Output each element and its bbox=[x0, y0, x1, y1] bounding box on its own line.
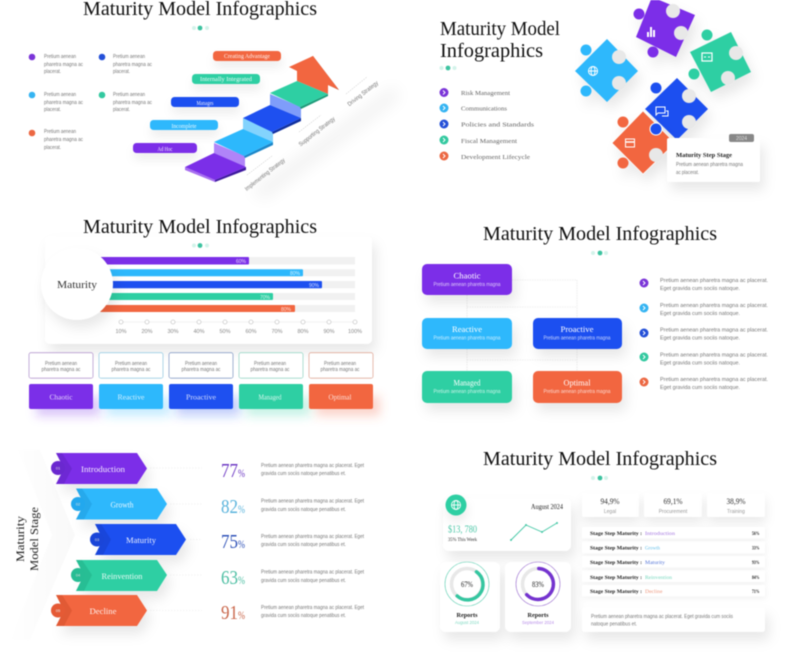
legend list: Pretium aenean bbox=[44, 92, 76, 98]
hierarchy boxes: Optimal bbox=[564, 378, 591, 388]
stage rows: Reinvention bbox=[645, 575, 672, 581]
percentage axis: 30% bbox=[167, 329, 179, 335]
stage rows: Stage Step Maturity : bbox=[590, 546, 642, 552]
heading dots bbox=[440, 66, 456, 70]
stage labels: Incomplete bbox=[172, 124, 197, 130]
title dots bbox=[192, 243, 209, 248]
title dots bbox=[192, 26, 209, 30]
ring card: September: 83% bbox=[532, 580, 544, 589]
arrow: reinvention bbox=[71, 560, 167, 591]
stage boxes: Optimal bbox=[328, 392, 352, 402]
topic list: Policies and Standards bbox=[461, 122, 535, 128]
arrow: decline: 05 bbox=[56, 608, 61, 613]
panel: staircase maturity model bbox=[29, 0, 400, 200]
panel: maturity bar chart bbox=[29, 216, 380, 416]
arrow: reinvention: Reinvention bbox=[102, 572, 142, 581]
legend list: pharetra magna ac bbox=[44, 137, 83, 143]
stage labels: Manages bbox=[196, 101, 214, 107]
topic list: Communications bbox=[461, 106, 507, 112]
percentage axis bbox=[115, 320, 362, 335]
ring card: August: 67% bbox=[461, 580, 473, 589]
stage rows: 84% bbox=[752, 575, 760, 581]
descriptions: gravida cum sociis natoque penatibus et. bbox=[261, 578, 346, 584]
arrow: decline: Decline bbox=[90, 607, 117, 616]
caption text: pharetra magna ac bbox=[42, 367, 81, 373]
stage labels bbox=[133, 51, 281, 153]
percentages: 82% bbox=[221, 496, 245, 518]
stage boxes bbox=[29, 384, 380, 416]
description list: Eget gravida cum sociis natoque. bbox=[660, 385, 740, 391]
strategy labels: Driving Strategy bbox=[347, 80, 380, 108]
staircase arrow bbox=[185, 56, 339, 182]
stage boxes: Reactive bbox=[118, 392, 145, 402]
panel: maturity model stage arrows bbox=[10, 450, 365, 640]
legend list: pharetra magna ac bbox=[44, 62, 83, 68]
title: Maturity Model Infographics bbox=[83, 216, 317, 238]
percentage axis: 70% bbox=[271, 329, 283, 335]
bars: 90% bbox=[309, 283, 320, 289]
descriptions: gravida cum sociis natoque penatibus et. bbox=[261, 613, 346, 619]
caption text: pharetra magna ac bbox=[250, 367, 290, 373]
ring card: September bbox=[505, 562, 571, 632]
chart card bbox=[45, 236, 372, 344]
percentage axis: 60% bbox=[245, 329, 257, 335]
background chevron bbox=[10, 450, 75, 640]
caption text: Pretium aenean bbox=[324, 361, 356, 367]
heading: Infographics bbox=[440, 40, 543, 62]
legend list bbox=[29, 54, 152, 151]
description list bbox=[640, 278, 768, 391]
staircase shadow bbox=[250, 85, 400, 200]
arrow: maturity: 03 bbox=[95, 537, 100, 542]
hierarchy boxes: Managed bbox=[454, 378, 480, 388]
caption text: Pretium aenean bbox=[115, 361, 147, 367]
percentages: 75% bbox=[221, 531, 245, 553]
panel: stage hierarchy bbox=[422, 223, 768, 403]
stage boxes: Proactive bbox=[186, 392, 217, 402]
descriptions bbox=[261, 463, 365, 619]
callout card: ac placerat. bbox=[676, 170, 699, 176]
bars: 80% bbox=[290, 271, 301, 277]
stage labels: Ad Hoc bbox=[158, 147, 173, 153]
stage rows: 71% bbox=[752, 589, 760, 595]
puzzle: purple piece bbox=[634, 0, 695, 58]
stage rows: Stage Step Maturity : bbox=[590, 531, 642, 537]
stat cards: 94,9% bbox=[600, 496, 620, 506]
dotted connectors bbox=[467, 280, 577, 371]
title dots bbox=[591, 476, 608, 480]
revenue card: August 2024 bbox=[531, 503, 563, 511]
legend list: Pretium aenean bbox=[113, 54, 145, 60]
ring card: September: Reports bbox=[528, 612, 549, 619]
percentage axis: 40% bbox=[193, 329, 205, 335]
note card bbox=[582, 607, 765, 632]
outlined captions bbox=[29, 353, 373, 378]
legend list: placerat. bbox=[113, 107, 130, 113]
revenue card: 35% This Week bbox=[448, 537, 477, 543]
caption text: pharetra magna ac bbox=[182, 367, 221, 373]
percentage axis: 90% bbox=[323, 329, 335, 335]
stat cards: Procurement bbox=[659, 509, 688, 515]
caption text: Pretium aenean bbox=[45, 361, 77, 367]
stage rows: Maturity bbox=[645, 560, 665, 566]
percentages bbox=[221, 460, 245, 624]
caption text: pharetra magna ac bbox=[112, 367, 151, 373]
stage rows: Growth bbox=[645, 546, 660, 552]
descriptions: Pretium aenean pharetra magna ac placerat. Eget bbox=[261, 463, 365, 469]
stage rows: Decline bbox=[645, 589, 663, 595]
caption text bbox=[42, 361, 360, 373]
stat cards: 38,9% bbox=[726, 496, 746, 506]
description list: Eget gravida cum sociis natoque. bbox=[660, 311, 740, 317]
caption text: Pretium aenean bbox=[185, 361, 217, 367]
legend list: placerat. bbox=[113, 69, 130, 75]
stage rows: 56% bbox=[752, 531, 760, 537]
legend list: pharetra magna ac bbox=[113, 100, 152, 106]
dotted leaders bbox=[150, 468, 202, 610]
arrow: maturity: Maturity bbox=[126, 536, 156, 545]
stage boxes: Managed bbox=[258, 392, 282, 402]
descriptions: Pretium aenean pharetra magna ac placerat. Eget bbox=[261, 534, 365, 540]
hierarchy boxes: Pretium aenean pharetra magna bbox=[434, 389, 501, 395]
title: Maturity Model Infographics bbox=[483, 448, 717, 470]
callout card: Pretium aenean pharetra magna bbox=[676, 162, 743, 168]
callout card: Maturity Step Stage bbox=[676, 152, 732, 159]
descriptions: gravida cum sociis natoque penatibus et. bbox=[261, 542, 346, 548]
stage rows: Introduction bbox=[645, 531, 675, 537]
legend list: placerat. bbox=[44, 107, 61, 113]
percentage axis: 20% bbox=[141, 329, 153, 335]
description list: Pretium aenean pharetra magna ac placerat. bbox=[660, 377, 768, 383]
percentage axis: 50% bbox=[219, 329, 231, 335]
note card: natoque penatibus et. bbox=[591, 622, 637, 628]
stat cards: Legal bbox=[604, 509, 616, 515]
ring card: August: August 2024 bbox=[455, 620, 479, 625]
legend list: Pretium aenean bbox=[44, 129, 76, 135]
stage rows: Stage Step Maturity : bbox=[590, 560, 642, 566]
strategy labels: Implementing Strategy bbox=[244, 158, 287, 193]
legend list: Pretium aenean bbox=[44, 54, 76, 60]
stat cards bbox=[582, 493, 765, 517]
arrow: reinvention: 04 bbox=[76, 572, 81, 578]
puzzle: orange piece bbox=[612, 111, 675, 174]
stat cards: Training bbox=[727, 509, 745, 515]
stage rows: Stage Step Maturity : bbox=[590, 589, 642, 595]
bars: 80% bbox=[281, 307, 292, 313]
hierarchy boxes: Pretium aenean pharetra magna bbox=[434, 282, 501, 288]
puzzle: cyan piece bbox=[575, 39, 638, 102]
stage rows: 93% bbox=[752, 560, 760, 566]
hierarchy boxes bbox=[422, 264, 622, 403]
heading: Maturity Model bbox=[440, 18, 560, 40]
title dots bbox=[591, 251, 608, 255]
puzzle: green piece bbox=[688, 30, 751, 92]
descriptions: Pretium aenean pharetra magna ac placerat. Eget bbox=[261, 605, 365, 611]
legend list: pharetra magna ac bbox=[113, 62, 152, 68]
percentages: 63% bbox=[221, 567, 245, 589]
revenue card: $13, 780 bbox=[448, 524, 477, 536]
percentage axis: 100% bbox=[348, 329, 362, 335]
descriptions: Pretium aenean pharetra magna ac placerat. Eget bbox=[261, 498, 365, 504]
arrow: introduction: 01 bbox=[56, 466, 61, 470]
maturity circle: Maturity bbox=[57, 279, 98, 291]
ring card: September: September 2024 bbox=[522, 620, 554, 625]
legend list: placerat. bbox=[44, 145, 61, 151]
maturity circle bbox=[41, 248, 113, 320]
arrow: growth: Growth bbox=[110, 500, 134, 510]
description list: Pretium aenean pharetra magna ac placerat. bbox=[660, 352, 768, 358]
ring card: August bbox=[440, 562, 500, 632]
bars bbox=[100, 257, 355, 313]
panel: puzzle pieces bbox=[440, 0, 760, 182]
description list: Pretium aenean pharetra magna ac placerat. bbox=[660, 303, 768, 309]
description list: Eget gravida cum sociis natoque. bbox=[660, 360, 740, 366]
note card: Pretium aenean pharetra magna ac placerat. Eget gravida cum sociis bbox=[591, 614, 733, 620]
vertical title: Maturity bbox=[13, 516, 27, 562]
stat cards: 69,1% bbox=[664, 496, 682, 506]
arrow: introduction: Introduction bbox=[81, 465, 125, 474]
stage rows: Stage Step Maturity : bbox=[590, 575, 642, 581]
stage labels: Creating Advantage bbox=[224, 54, 270, 60]
ring card: August: Reports bbox=[456, 612, 478, 619]
description list: Eget gravida cum sociis natoque. bbox=[660, 286, 740, 292]
arrow: maturity bbox=[90, 524, 186, 555]
stage rows: 33% bbox=[752, 546, 760, 552]
topic list: Development Lifecycle bbox=[461, 154, 530, 161]
descriptions: gravida cum sociis natoque penatibus et. bbox=[261, 471, 346, 477]
percentages: 91% bbox=[221, 602, 245, 624]
bars: 70% bbox=[260, 295, 271, 301]
arrow: growth: 02 bbox=[76, 502, 81, 506]
panel: dashboard bbox=[440, 448, 765, 632]
topic list: Risk Management bbox=[461, 90, 510, 97]
title: Maturity Model Infographics bbox=[483, 223, 717, 245]
description list: Eget gravida cum sociis natoque. bbox=[660, 336, 740, 342]
callout card: 2024 bbox=[736, 136, 747, 142]
legend list: pharetra magna ac bbox=[44, 100, 83, 106]
caption text: pharetra magna ac bbox=[320, 367, 360, 373]
topic list: Fiscal Management bbox=[461, 138, 517, 145]
revenue card bbox=[443, 494, 571, 551]
hierarchy boxes: Proactive bbox=[560, 325, 594, 334]
arrow: growth bbox=[71, 488, 167, 520]
arrow: introduction bbox=[51, 453, 147, 484]
description list: Pretium aenean pharetra magna ac placerat. bbox=[660, 278, 768, 284]
bars: 60% bbox=[236, 259, 247, 265]
caption text: Pretium aenean bbox=[254, 361, 286, 367]
descriptions: gravida cum sociis natoque penatibus et. bbox=[261, 507, 346, 513]
stage labels: Internally Integrated bbox=[200, 77, 252, 83]
stage rows bbox=[582, 527, 765, 596]
hierarchy boxes: Pretium aenean pharetra magna bbox=[544, 336, 611, 342]
percentages: 77% bbox=[221, 460, 245, 482]
hierarchy boxes: Reactive bbox=[452, 325, 482, 334]
strategy labels: Supporting Strategy bbox=[298, 116, 337, 148]
percentage axis: 10% bbox=[115, 329, 127, 335]
vertical title: Model Stage bbox=[27, 507, 41, 571]
descriptions: Pretium aenean pharetra magna ac placerat. Eget bbox=[261, 570, 365, 576]
callout card bbox=[667, 134, 760, 182]
description list: Pretium aenean pharetra magna ac placerat. bbox=[660, 328, 768, 334]
strategy labels bbox=[244, 77, 380, 193]
stage boxes: Chaotic bbox=[50, 392, 73, 402]
legend list: placerat. bbox=[44, 69, 61, 75]
hierarchy boxes: Chaotic bbox=[454, 272, 481, 280]
legend list: Pretium aenean bbox=[113, 92, 145, 98]
hierarchy boxes: Pretium aenean pharetra magna bbox=[544, 389, 611, 395]
percentage axis: 80% bbox=[297, 329, 309, 335]
vertical title bbox=[13, 507, 41, 571]
arrow: decline bbox=[51, 595, 147, 626]
heading bbox=[440, 18, 560, 62]
hierarchy boxes: Pretium aenean pharetra magna bbox=[434, 336, 501, 342]
topic list bbox=[440, 88, 535, 161]
puzzle: blue piece bbox=[645, 78, 708, 140]
